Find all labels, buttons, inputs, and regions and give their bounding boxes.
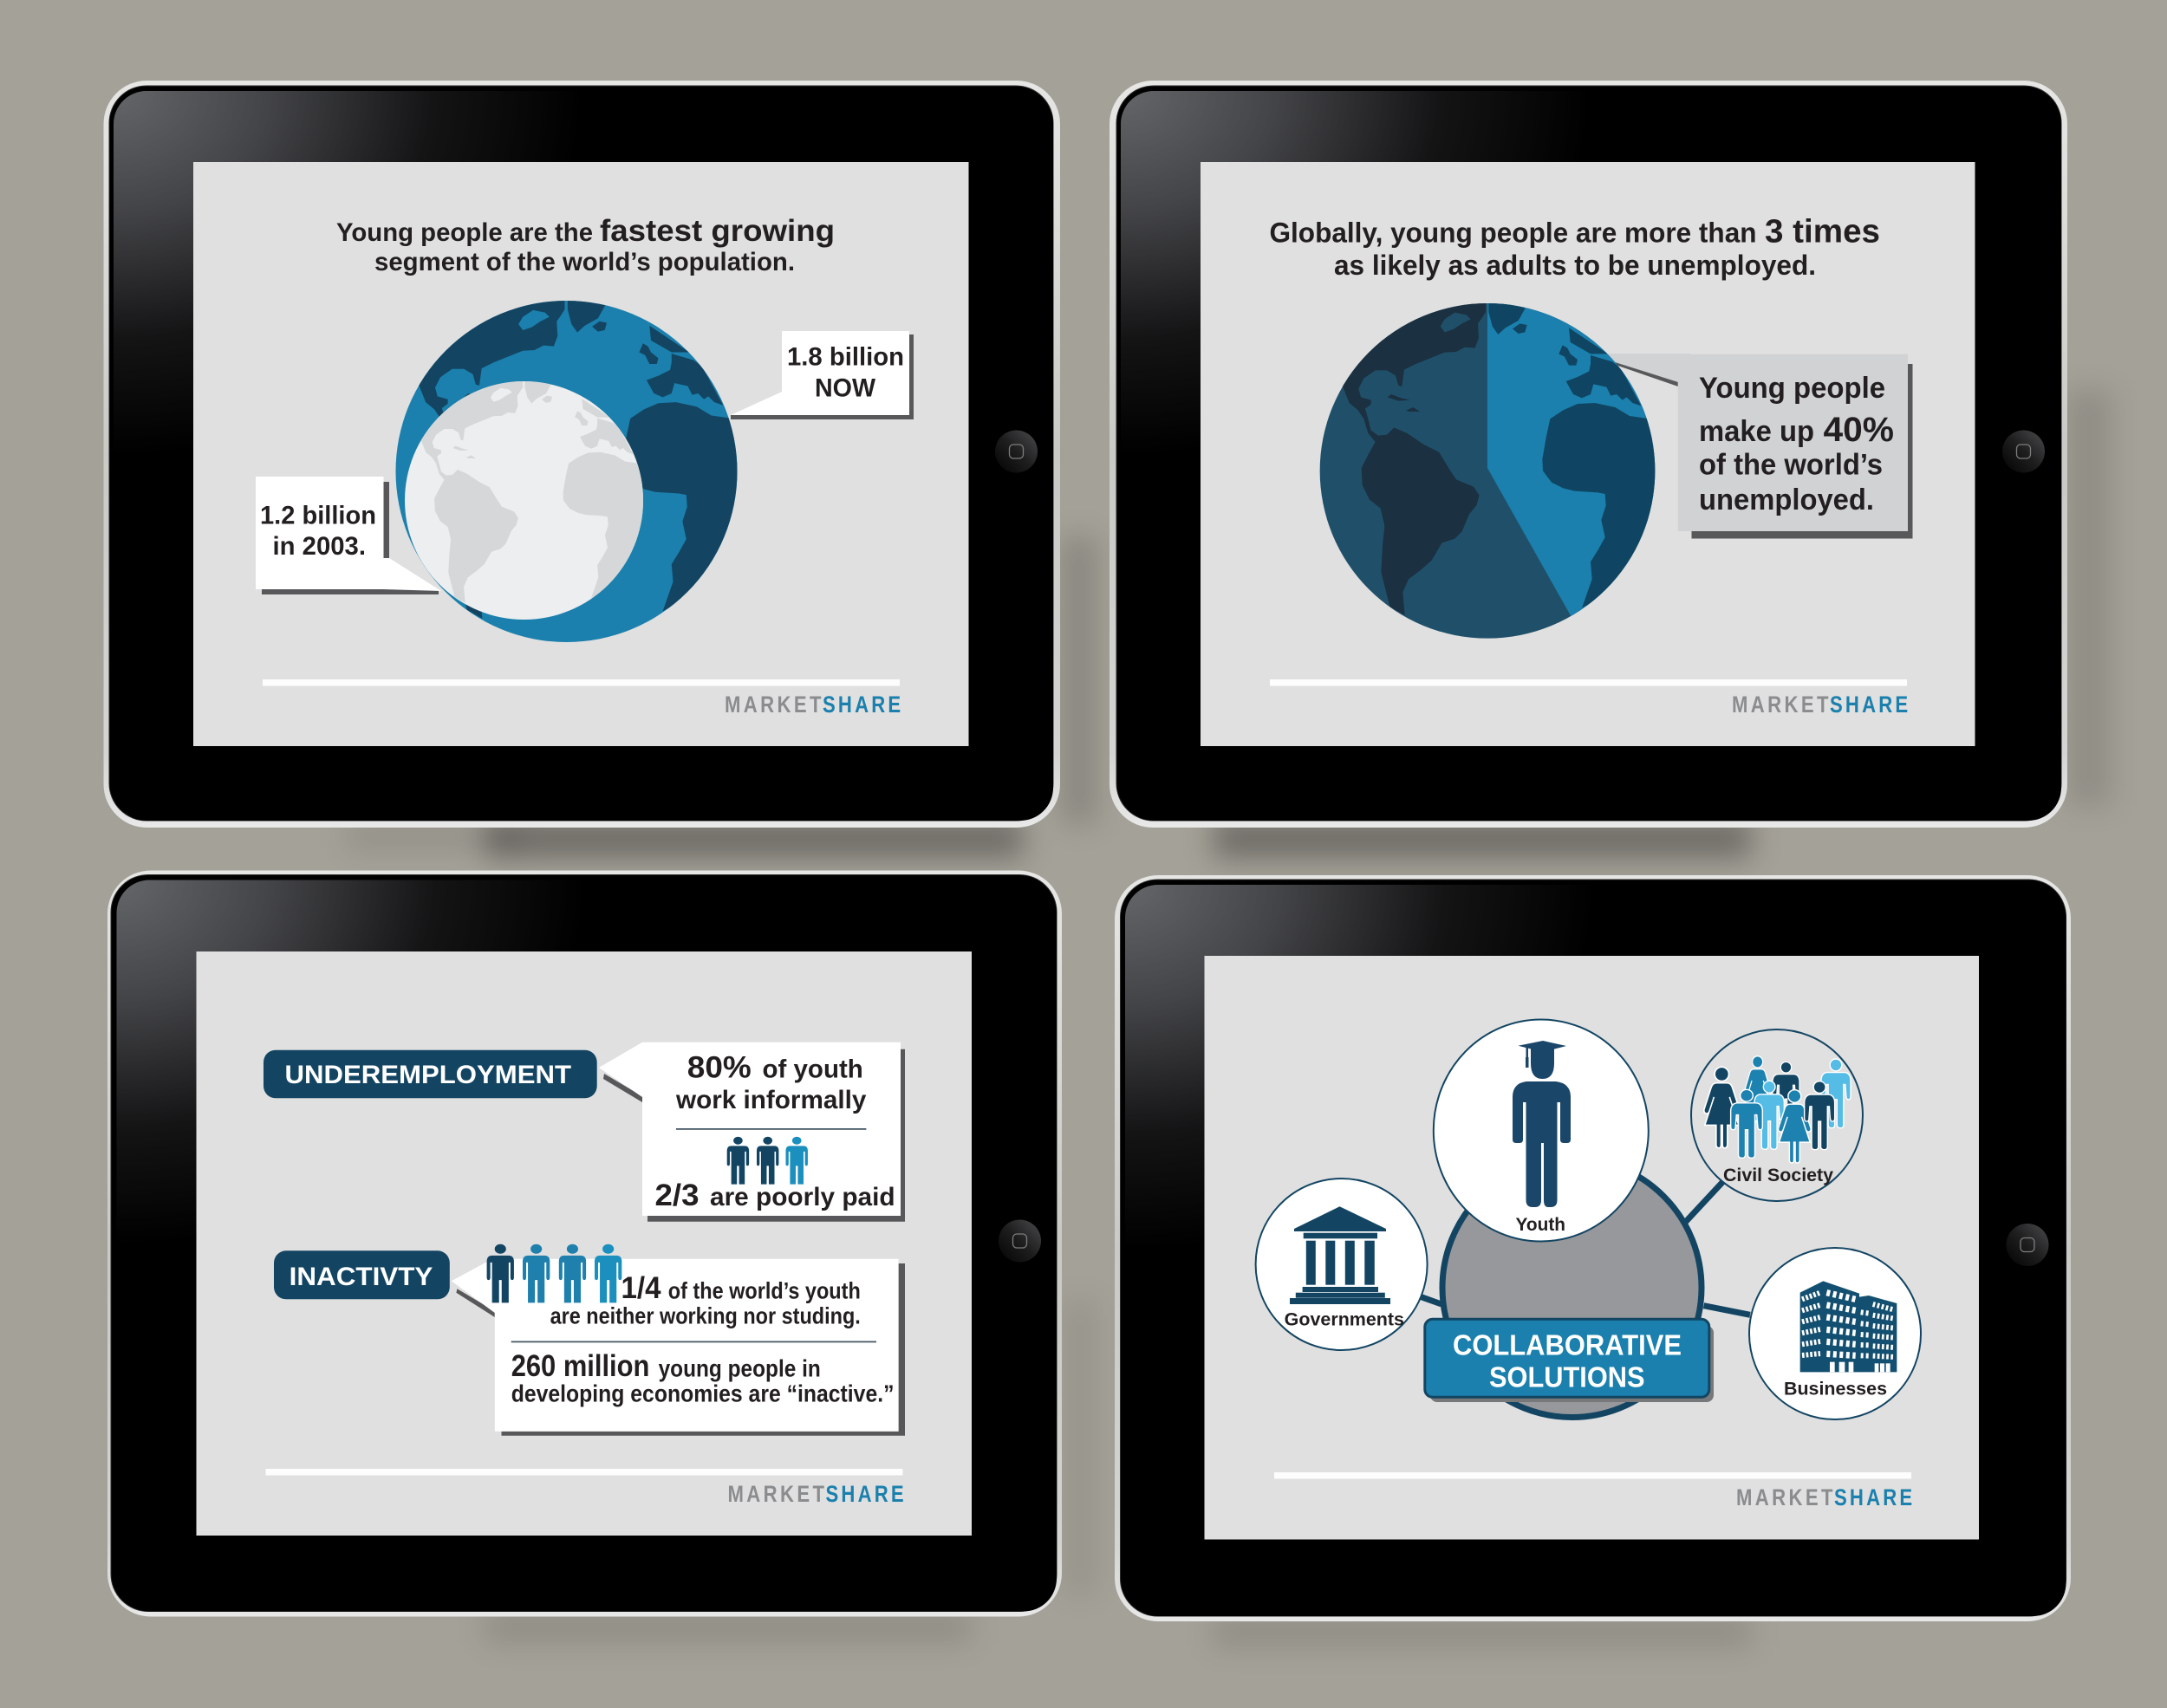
- tablet 1 heading: Young people are the: [336, 218, 593, 247]
- tablet 3 bezel: [107, 870, 1062, 1617]
- callout: 1.8 billion now: [731, 331, 914, 419]
- callout: young people make up 40%: [1678, 354, 1912, 539]
- tablet 2 screen: [1201, 162, 1975, 746]
- tablet 4 bezel: [1115, 875, 2071, 1621]
- tablet 4 footer: MARKET: [1736, 1485, 1833, 1511]
- icon: government building: [1290, 1206, 1390, 1304]
- circle: youth: Youth: [1515, 1215, 1565, 1235]
- icons: 1 of 4 people: [487, 1244, 621, 1302]
- tablet 2 heading: Globally, young people are more than: [1269, 217, 1756, 248]
- callout: 1.2 billion in 2003: [256, 477, 441, 594]
- tablet 1 home button: [995, 430, 1038, 473]
- icon: graduate: [1513, 1041, 1571, 1207]
- tablet shadows: [347, 390, 2111, 1646]
- callout: young people make up 40%: unemployed.: [1699, 484, 1874, 516]
- tablet 1 bezel: [104, 81, 1060, 828]
- tablet 1 heading: segment of the world’s population.: [374, 248, 795, 276]
- tablet 2 bezel: [1110, 81, 2067, 828]
- callout: 1.2 billion in 2003: in 2003.: [272, 532, 366, 561]
- callout: 80% of youth: [599, 1042, 905, 1222]
- tablet 3 home button: [999, 1220, 1041, 1262]
- callout: 80% of youth: are poorly paid: [710, 1183, 895, 1211]
- tablet 2 home button: [2002, 430, 2045, 473]
- tablet 1: fastest growing segment: [104, 81, 1060, 828]
- pill: inactivity: INACTIVTY: [290, 1263, 433, 1291]
- callout: 1.8 billion now: 1.8 billion: [787, 343, 904, 371]
- callout: 80% of youth: 2/3: [655, 1179, 699, 1212]
- callout: 80% of youth: 80%: [687, 1050, 752, 1084]
- banner: collaborative solutions: [1425, 1319, 1714, 1402]
- icons: 2 of 3 people: [727, 1137, 808, 1185]
- banner: collaborative solutions: COLLABORATIVE: [1453, 1329, 1682, 1361]
- tablet 1 heading: fastest growing: [600, 214, 835, 248]
- callout tail: young people: [1589, 354, 1690, 386]
- tablet 4 footer: SHARE: [1834, 1485, 1912, 1511]
- banner: collaborative solutions: SOLUTIONS: [1489, 1361, 1645, 1393]
- tablet 2 heading: [1269, 213, 1880, 281]
- icon: crowd: [1704, 1056, 1851, 1163]
- circle: youth: [1434, 1019, 1649, 1241]
- pill: underemployment: UNDEREMPLOYMENT: [284, 1061, 571, 1089]
- tablet 1 heading: [336, 214, 835, 276]
- callout: 1.8 billion now: NOW: [815, 374, 876, 402]
- tablet 3 footer: MARKET: [728, 1482, 824, 1508]
- tablet 4 screen: [1205, 956, 1979, 1539]
- tablet 4 footer: [1274, 1472, 1912, 1511]
- tablet 1 footer: [263, 679, 901, 718]
- tablet 2 footer: SHARE: [1830, 692, 1908, 718]
- callout: 80% of youth: work informally: [675, 1086, 867, 1114]
- circle: civil society: Civil Society: [1723, 1166, 1833, 1185]
- pill: inactivity: [274, 1250, 450, 1299]
- tablet 1 footer: MARKET: [725, 692, 822, 718]
- callout: 1/4 of the world's youth: of the world’s youth: [668, 1277, 861, 1303]
- tablet 4: collaborative solutions: [1115, 875, 2071, 1621]
- callout: young people make up 40%: 40%: [1824, 411, 1894, 449]
- central circle: [1442, 1158, 1702, 1418]
- connector lines: [1422, 1182, 1750, 1315]
- callout: 1/4 of the world's youth: young people in: [659, 1355, 821, 1381]
- circle: businesses: [1749, 1248, 1921, 1419]
- tablet 4 home button: [2006, 1224, 2049, 1266]
- callout: 1/4 of the world's youth: 260 million: [511, 1349, 649, 1383]
- callout: 1/4 of the world's youth: [452, 1244, 905, 1436]
- circle: businesses: Businesses: [1784, 1380, 1887, 1399]
- circle: civil society: [1691, 1029, 1863, 1201]
- tablet 3 footer: SHARE: [825, 1482, 904, 1508]
- pie globe: [1319, 303, 1656, 639]
- tablet 2: 3 times as likely: [1110, 81, 2067, 828]
- callout: young people make up 40%: of the world’s: [1699, 449, 1883, 482]
- circle: governments: Governments: [1285, 1309, 1404, 1329]
- large globe: [395, 301, 737, 642]
- tablet 3 footer: [265, 1469, 904, 1508]
- tablet 1 footer: SHARE: [823, 692, 901, 718]
- callout: 1.2 billion in 2003: 1.2 billion: [260, 501, 376, 530]
- tablet 2 footer: MARKET: [1732, 692, 1829, 718]
- callout: 80% of youth: of youth: [763, 1055, 863, 1083]
- icon: office building: [1800, 1281, 1897, 1372]
- callout: young people make up 40%: Young people: [1699, 372, 1885, 405]
- callout: young people make up 40%: make up: [1699, 415, 1814, 448]
- tablet 2 footer: [1270, 679, 1908, 718]
- callout: 1/4 of the world's youth: are neither working nor studing.: [550, 1303, 861, 1329]
- circle: governments: [1256, 1179, 1428, 1350]
- tablet 2 heading: 3 times: [1765, 213, 1880, 250]
- tablet 3: underemployment and inactivity: [107, 870, 1062, 1617]
- tablet 3 screen: [196, 951, 972, 1536]
- small white globe: [405, 381, 643, 620]
- callout: 1/4 of the world's youth: developing economies are “inactive.”: [511, 1380, 895, 1407]
- callout: 1/4 of the world's youth: 1/4: [621, 1271, 661, 1305]
- tablet 2 heading: as likely as adults to be unemployed.: [1334, 250, 1816, 281]
- pill: underemployment: [264, 1050, 597, 1098]
- tablet 1 screen: [193, 162, 969, 746]
